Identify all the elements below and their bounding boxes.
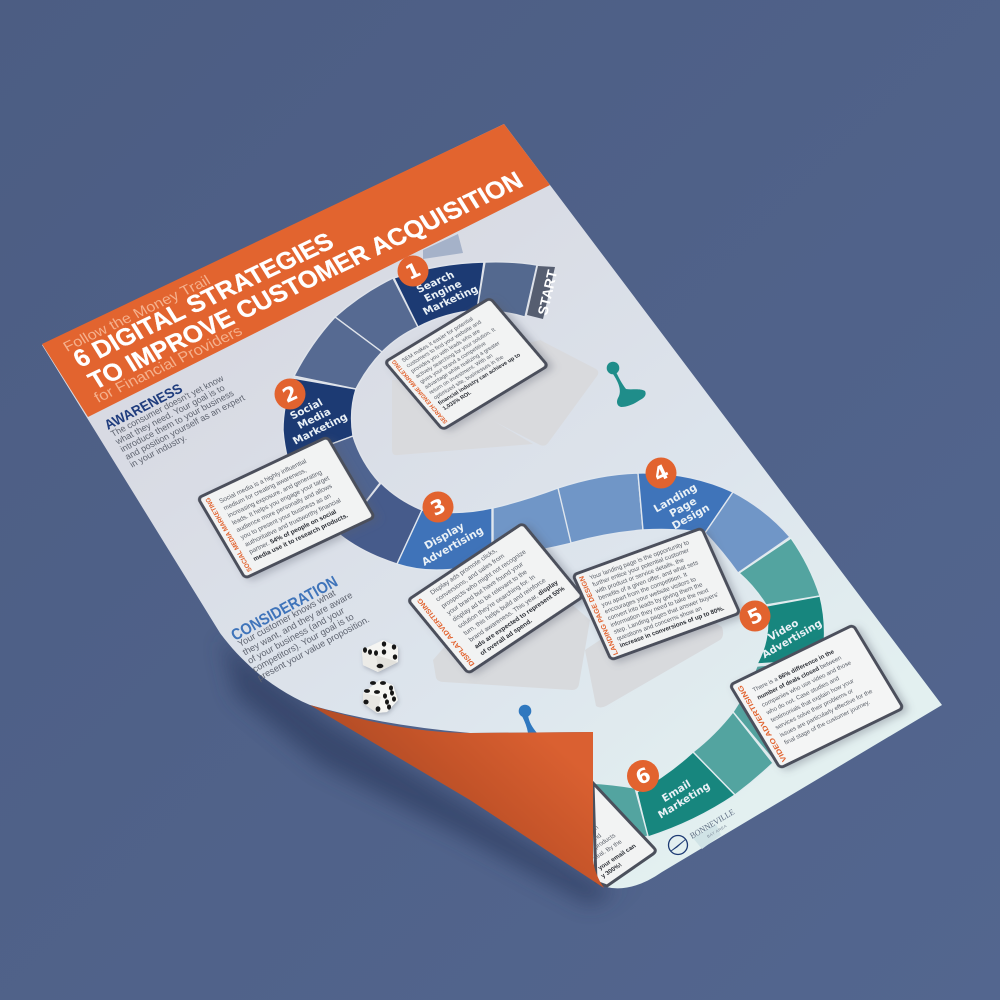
segment label 2: Marketing	[291, 411, 350, 447]
card body: Your landing page is the opportunity to	[588, 539, 691, 582]
card body: you to present your business as an	[239, 493, 333, 541]
card body: step. Landing pages that answer buyers'	[613, 591, 720, 636]
consideration body: competitors). Your goal is to	[251, 612, 355, 674]
card body: your brand but have found your	[446, 561, 526, 617]
card body: 1,033% ROI.	[442, 390, 473, 412]
card title: LANDING PAGE DESIGN	[578, 575, 620, 656]
card title: VIDEO ADVERTISING	[737, 683, 789, 763]
segment label 4: Page	[667, 495, 699, 520]
card body: return on investment. With an	[428, 353, 494, 396]
number badge 3	[422, 492, 454, 522]
card body: authoritative and trustworthy financial	[244, 497, 342, 548]
number badge 4	[646, 458, 676, 488]
card body: turn, this helps build and reinforce	[462, 577, 548, 637]
number badge 6: 6	[632, 762, 654, 790]
logo tagline: BAY AREA	[706, 823, 728, 839]
number badge 2: 2	[279, 380, 301, 408]
card title: SOCIAL MEDIA MARKETING	[205, 496, 254, 573]
card body: Social media is a highly influential	[218, 458, 308, 505]
card: video advertising	[730, 625, 903, 768]
consideration body: of your business (and your	[246, 606, 346, 666]
card body: media use it to research products.	[252, 512, 350, 563]
card body: financial industry can achieve up to	[437, 352, 523, 406]
curl shadow	[222, 640, 640, 905]
consideration heading: CONSIDERATION	[229, 574, 341, 644]
card body: SEM makes it easier for potential	[401, 317, 475, 364]
number badge 1	[398, 256, 428, 286]
consideration body: present your value proposition.	[256, 614, 371, 683]
die one	[362, 640, 398, 672]
consideration body: Your customer knows what	[236, 588, 338, 649]
awareness heading: AWARENESS	[101, 380, 185, 433]
number badge 4: 4	[650, 459, 672, 487]
upper game path	[283, 262, 537, 564]
card body: questions and concerns show an	[616, 605, 704, 642]
start tab	[527, 266, 560, 319]
card body: services solve their problems or	[774, 688, 855, 731]
card frame	[198, 437, 374, 578]
card body: advantage while realizing a greater	[424, 341, 502, 390]
awareness body: in your industry.	[128, 433, 188, 469]
decorative tab	[423, 234, 463, 259]
card body: number of deals closed between	[756, 655, 843, 701]
title line 2: TO IMPROVE CUSTOMER ACQUISITION	[83, 167, 528, 395]
icon: blue pawn	[519, 705, 537, 733]
card body: of overall ad spend.	[479, 618, 534, 657]
segment label 2: Social	[288, 397, 325, 422]
number badge 1: 1	[402, 257, 424, 285]
number badge 3: 3	[427, 493, 449, 521]
segment label 1: Engine	[422, 278, 464, 305]
card body: provides you with leads who are	[410, 329, 482, 375]
logo: bonneville	[668, 807, 736, 854]
card body: audience more personally and allows	[235, 483, 334, 534]
start label: START	[534, 268, 560, 317]
number badge 6	[627, 760, 659, 792]
card body: display ad to be relevant to the	[451, 569, 529, 623]
consideration text block	[229, 574, 371, 683]
card body: increase in conversions of up to 80%.	[619, 605, 726, 649]
card fragment text: products	[593, 833, 617, 850]
card frame	[408, 523, 583, 673]
card title: SEARCH ENGINE MARKETING	[391, 358, 450, 424]
card body: customers to find your website and	[405, 320, 483, 369]
card body: information they need to take the next	[610, 587, 710, 629]
number badge 5: 5	[744, 602, 766, 630]
lower game path	[590, 538, 825, 850]
card frame	[730, 625, 903, 768]
awareness body: and position yourself as an expert	[123, 392, 247, 462]
card: search engine marketing	[385, 298, 548, 430]
awareness body: what they need. Your goal is to	[113, 383, 227, 447]
card body: who do not. Case studies and	[764, 675, 841, 717]
card body: increasing exposure, and generating	[227, 469, 324, 519]
card: display advertising	[408, 523, 583, 673]
card fragment text: your email can	[597, 843, 638, 871]
card body: gives your brand a competitive	[419, 341, 488, 385]
number badge 5	[740, 600, 770, 632]
segment label 4: Landing	[652, 482, 699, 515]
card title: DISPLAY ADVERTISING	[416, 597, 477, 667]
card body: you apart from the competition. It	[601, 571, 689, 609]
pre-title: Follow the Money Trail	[61, 273, 214, 355]
segment label 5: Video	[766, 617, 801, 644]
card body: There is a 66% difference in the	[751, 648, 836, 694]
card body: partner. 54% of people on social	[248, 509, 338, 556]
header banner	[42, 124, 550, 417]
segment label 2: Media	[296, 406, 333, 432]
card frame	[385, 298, 548, 430]
card: social media marketing	[198, 437, 374, 578]
card body: optimized site, businesses in the	[433, 355, 505, 401]
logo wordmark: BONNEVILLE	[688, 807, 736, 841]
card body: leads. It helps you engage your target	[231, 475, 331, 527]
card body: solution they're searching for. In	[457, 574, 537, 630]
card body: prospects who might not recognize	[440, 549, 528, 610]
segment label 1: Marketing	[421, 283, 480, 318]
card body: ads are expected to represent 50%	[473, 585, 567, 650]
card: landing page design	[573, 528, 740, 660]
segment label 3: Advertising	[420, 525, 486, 569]
middle game path	[397, 473, 790, 573]
card body: benefits of a given offer, and what sets	[597, 559, 699, 602]
card body: brand awareness. This year, display	[468, 579, 560, 644]
card body: encourages your website visitors to	[604, 576, 698, 615]
grey card stacks	[392, 340, 723, 708]
awareness text block	[101, 370, 252, 470]
card fragment text: y 300%!	[600, 862, 624, 879]
card body: convert into leads by giving them the	[607, 581, 704, 622]
card body: actively searching for your solution. It	[414, 327, 497, 380]
segment label 1: Search	[414, 269, 457, 296]
icon: dice	[362, 640, 398, 713]
card body: testimonials that explain how your	[770, 678, 855, 724]
card body: further entice your potential customer	[591, 547, 690, 588]
page curl flap	[310, 705, 604, 888]
segment label 4: Design	[670, 502, 712, 532]
title line 1: 6 DIGITAL STRATEGIES	[68, 228, 339, 373]
awareness body: introduce them to your business	[118, 388, 236, 454]
card body: with product or service details, the	[594, 557, 686, 595]
card fragment text	[592, 824, 638, 879]
card body: issues are particularly effective for the	[779, 688, 875, 739]
consideration body: they want, and they are aware	[241, 590, 354, 657]
card frame	[573, 528, 740, 660]
subtitle: for Financial Providers	[91, 323, 246, 406]
number badge 2	[274, 378, 306, 410]
die two	[363, 680, 398, 713]
card body: conversions, and sales from	[435, 553, 506, 603]
segment label 6: Email	[660, 778, 693, 805]
awareness body: The consumer doesn't yet know	[109, 373, 226, 439]
card body: medium for creating awareness,	[222, 467, 308, 512]
segment label 3: Display	[423, 520, 467, 552]
logo mark	[668, 836, 688, 854]
card body: final stage of the customer journey.	[783, 699, 872, 746]
card body: Display ads promote clicks,	[429, 547, 499, 596]
segment label 6: Marketing	[656, 780, 712, 821]
card: email marketing (partly hidden by curl)	[592, 783, 655, 886]
icon: teal pawn	[607, 362, 646, 407]
card fragment text: n	[593, 824, 601, 831]
paper sheet	[42, 124, 942, 888]
card fragment text: deal. By the	[592, 838, 624, 861]
card fragment text: nd	[593, 832, 604, 841]
card body: companies who use video and those	[760, 659, 853, 709]
segment label 5: Advertising	[760, 617, 824, 661]
